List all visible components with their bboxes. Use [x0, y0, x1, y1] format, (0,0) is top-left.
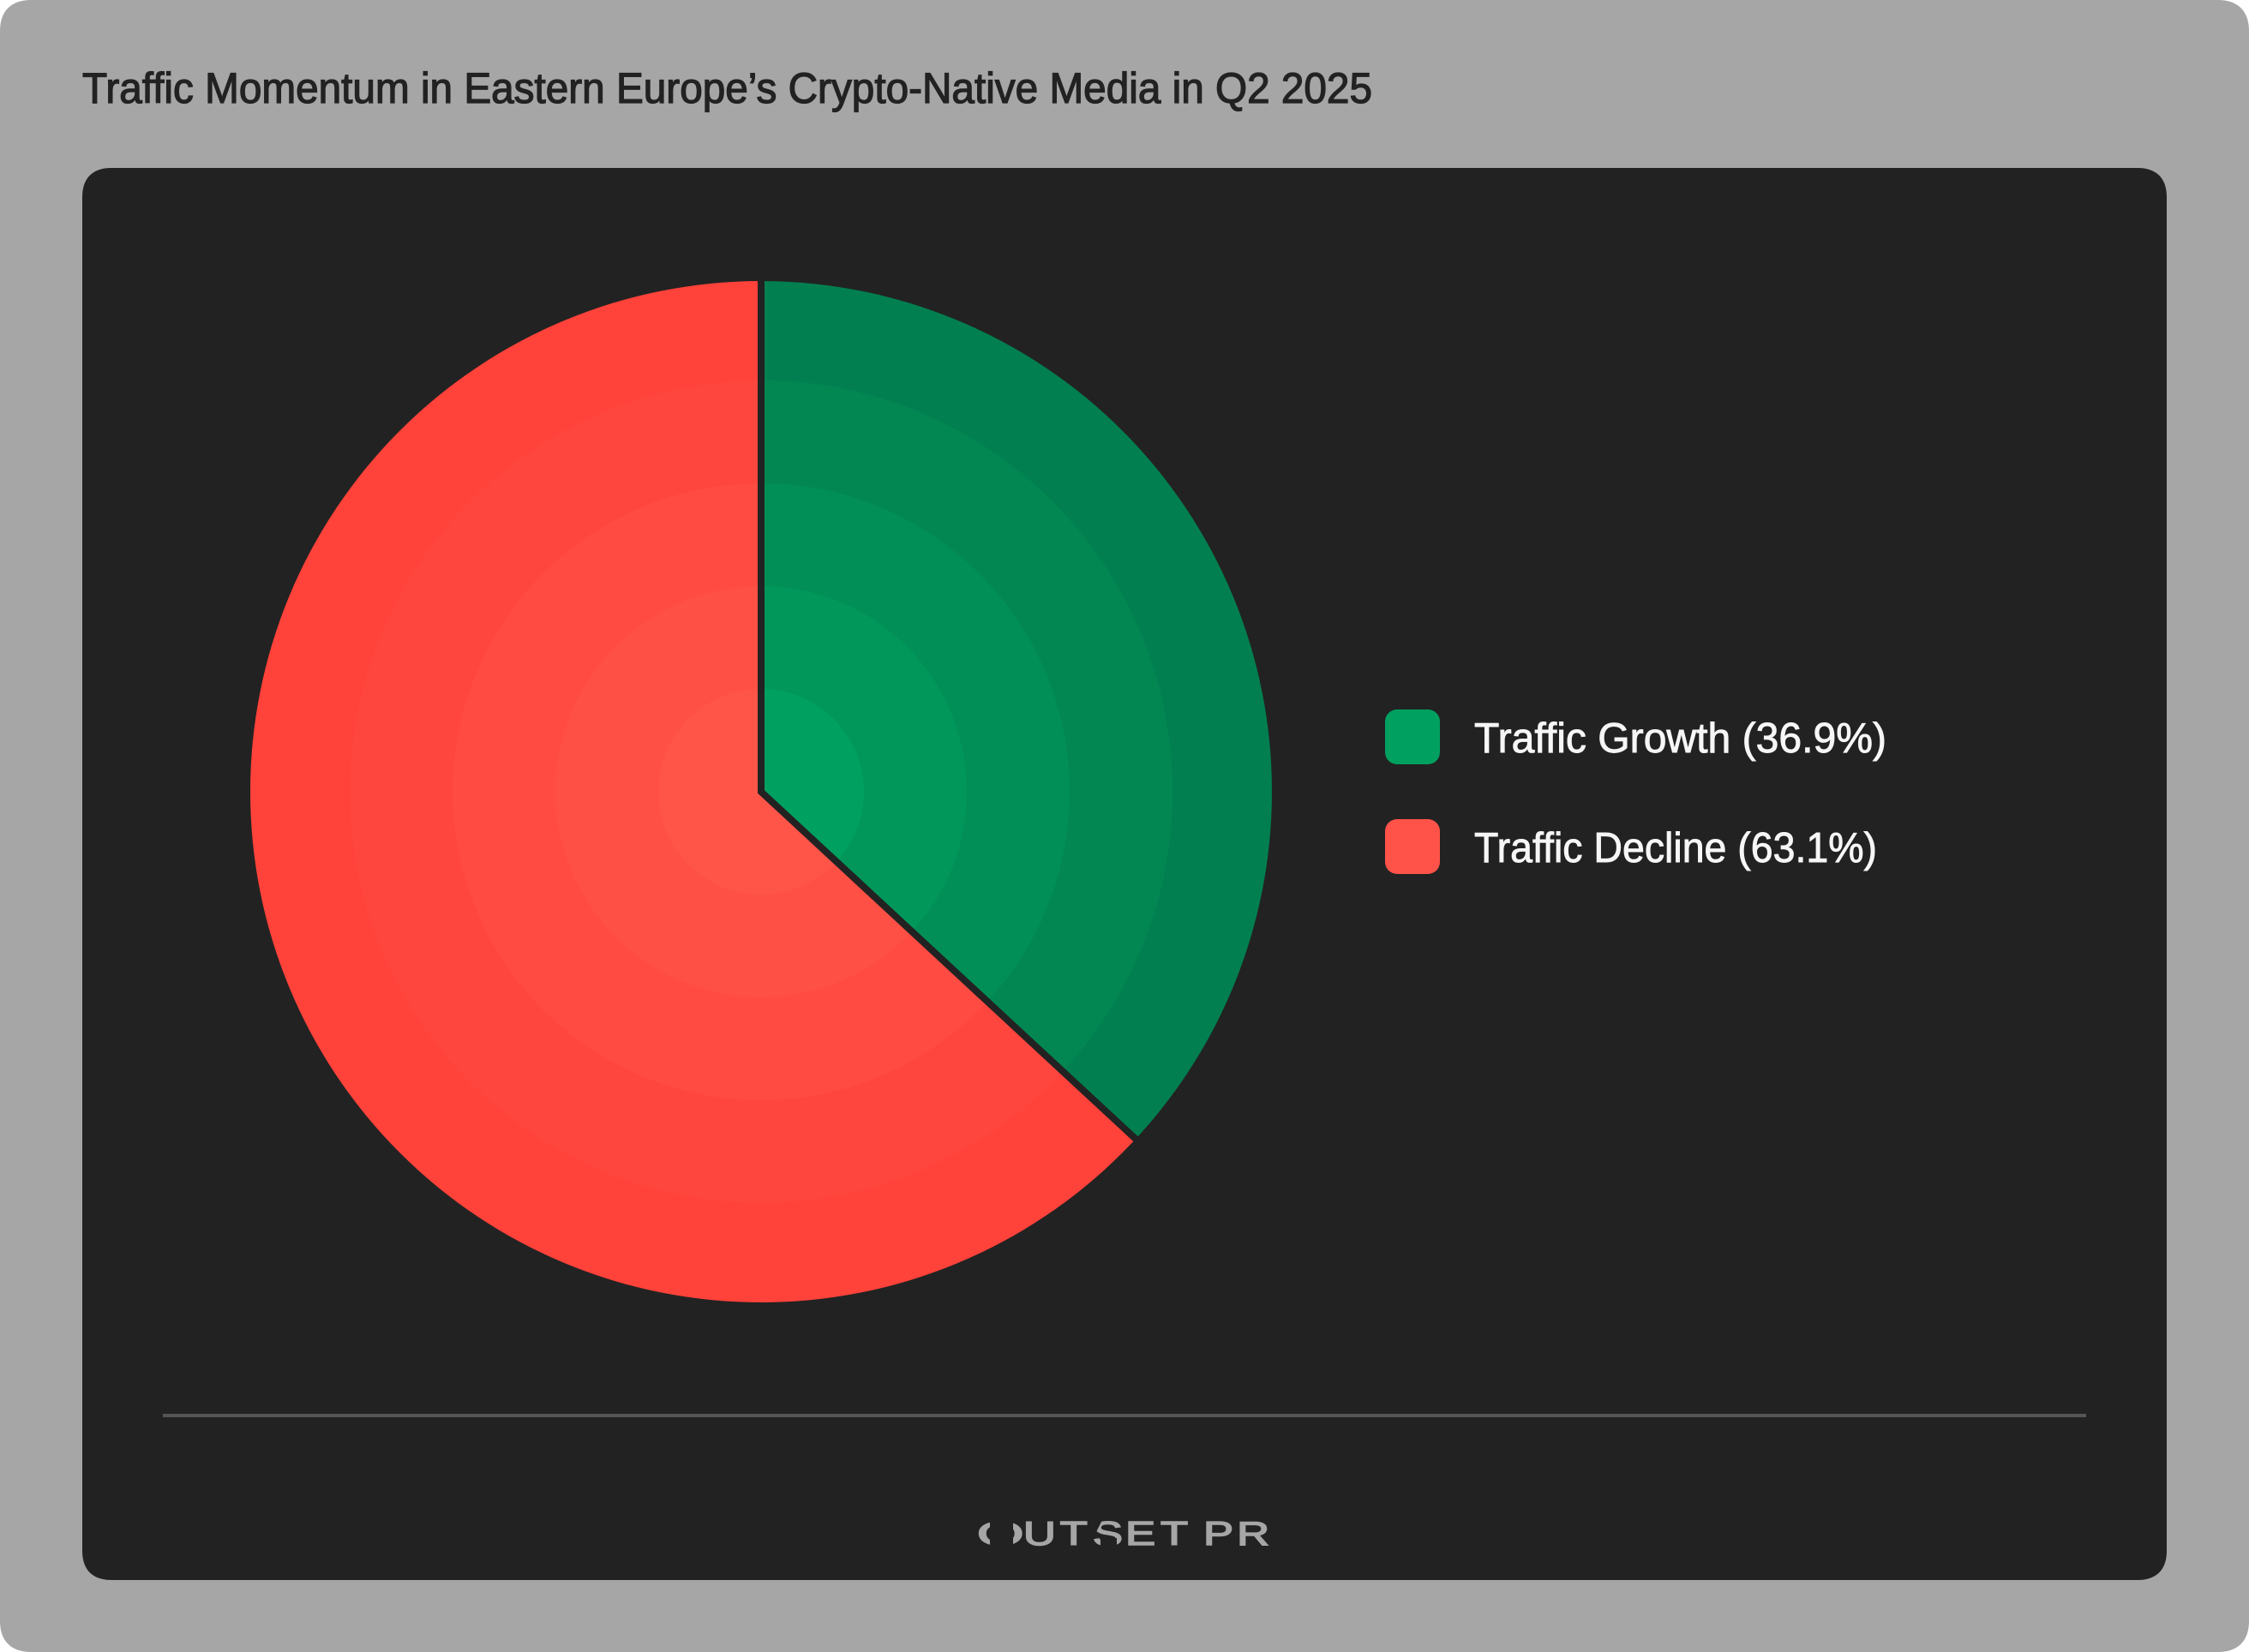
- panel: chart area: [82, 168, 2167, 1580]
- legend item: traffic growth: Traffic Growth (36.9%): [1474, 715, 1886, 762]
- legend: [1385, 709, 1886, 874]
- logo: Outset PR: UTSET PR: [1023, 1515, 1269, 1552]
- slice separator: [761, 274, 1138, 1141]
- logo: Outset PR: O: [977, 1515, 1024, 1553]
- legend item: traffic decline: [1385, 819, 1877, 874]
- title: Traffic Momentum in Eastern Europe’s Crypto-Native Media in Q2 2025: [82, 64, 1372, 112]
- legend item: traffic decline: Traffic Decline (63.1%): [1474, 825, 1877, 871]
- slice: traffic growth: [765, 281, 1272, 1136]
- pie chart: [250, 274, 1272, 1302]
- slice: traffic decline: [250, 281, 1133, 1302]
- legend item: traffic growth: [1385, 709, 1886, 764]
